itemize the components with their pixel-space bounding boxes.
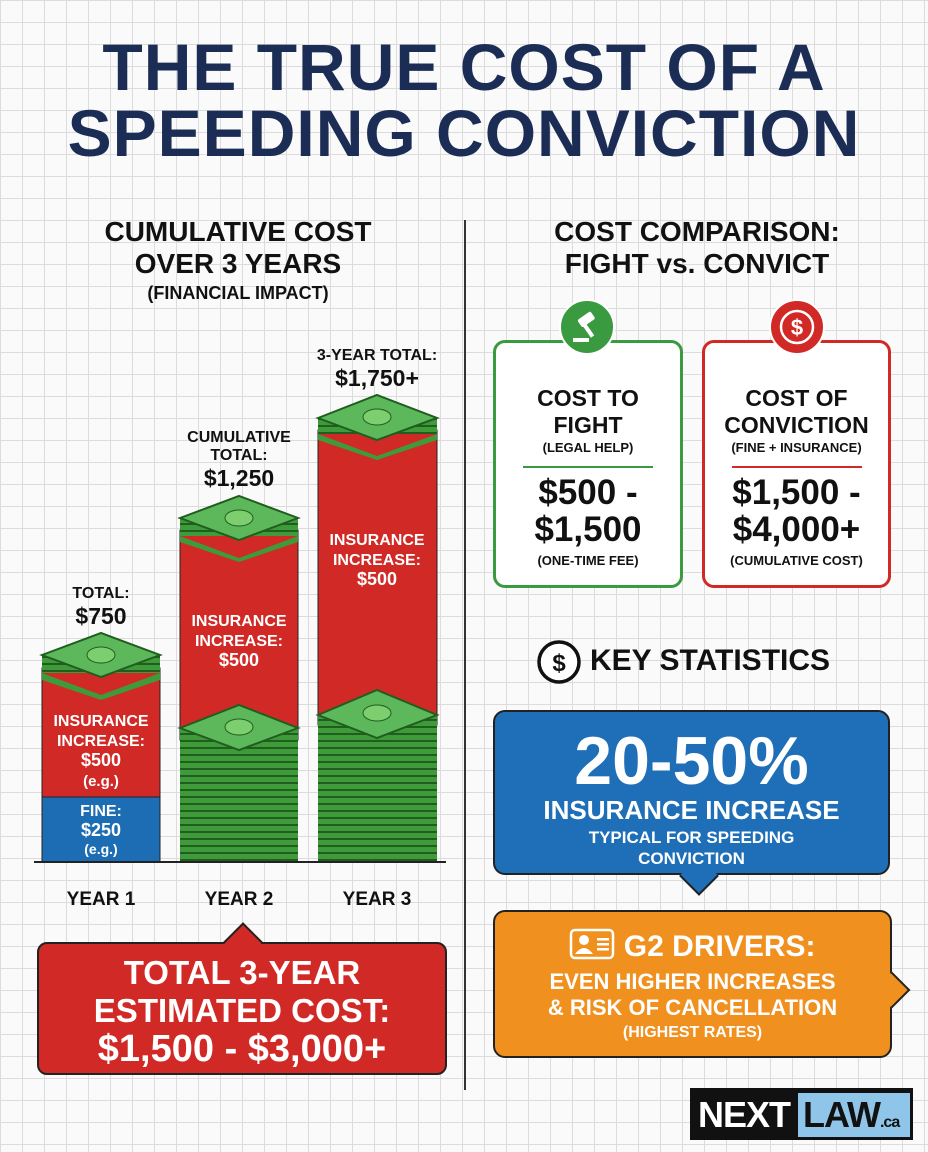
bar: year 2: INSURANCE xyxy=(191,613,287,630)
callout: total 3-year cost: TOTAL 3-YEAR xyxy=(124,954,360,991)
title: THE TRUE COST OF A xyxy=(102,30,826,104)
panel: cost to fight: FIGHT xyxy=(554,412,622,438)
divider xyxy=(464,220,466,1090)
callout: total 3-year cost: ESTIMATED COST: xyxy=(94,992,390,1029)
callout: total 3-year cost: $1,500 - $3,000+ xyxy=(98,1028,386,1070)
heading: cumulative cost: OVER 3 YEARS xyxy=(135,248,341,279)
bar: year 3: INCREASE: xyxy=(333,552,421,569)
bar: year 1: $500 xyxy=(81,750,121,770)
panel: cost of conviction: (FINE + INSURANCE) xyxy=(731,440,862,455)
icon: dollar circle: $ xyxy=(552,650,566,677)
callout: 20-50% xyxy=(493,710,890,875)
bar: year 1: $250 xyxy=(81,820,121,840)
panel: cost of conviction: CONVICTION xyxy=(724,412,869,438)
callout: 20-50%: CONVICTION xyxy=(638,849,745,868)
panel: cost to fight: $500 - xyxy=(538,473,638,512)
icon: dollar circle xyxy=(537,640,581,684)
bar: year 1: INCREASE: xyxy=(57,733,145,750)
totals labels: TOTAL: xyxy=(210,447,268,464)
icon: id card xyxy=(570,928,614,960)
logo: nextlaw: LAW.ca xyxy=(803,1094,899,1135)
panel: cost of conviction: $4,000+ xyxy=(733,510,860,549)
bar: year 3: $500 xyxy=(357,569,397,589)
bar: year 1: FINE: xyxy=(80,803,122,820)
callout: total 3-year cost xyxy=(37,942,447,1075)
panel: cost of conviction: $1,500 - xyxy=(732,473,861,512)
logo: nextlaw: NEXT xyxy=(698,1094,790,1135)
heading: cumulative cost: CUMULATIVE COST xyxy=(104,216,372,247)
bar: year 3 xyxy=(318,395,437,862)
totals labels: CUMULATIVE xyxy=(187,429,291,446)
callout: G2 drivers: EVEN HIGHER INCREASES xyxy=(549,969,836,994)
icon: gavel xyxy=(559,300,615,353)
heading: cost comparison xyxy=(554,216,840,279)
callout: 20-50%: INSURANCE INCREASE xyxy=(543,795,840,825)
callout: G2 drivers xyxy=(493,910,892,1058)
totals labels: 3-YEAR TOTAL: xyxy=(317,347,437,364)
bar chart xyxy=(34,347,446,910)
panel: cost to fight: (ONE-TIME FEE) xyxy=(537,553,639,568)
panel: cost of conviction: COST OF xyxy=(745,385,848,411)
heading: cost comparison: FIGHT vs. CONVICT xyxy=(565,248,829,279)
title xyxy=(68,30,860,170)
callout: G2 drivers: & RISK OF CANCELLATION xyxy=(548,995,837,1020)
callout: G2 drivers: G2 DRIVERS: xyxy=(624,930,816,963)
bar: year 1 xyxy=(42,633,160,862)
bar: year 1: INSURANCE xyxy=(53,713,149,730)
panel: cost to fight xyxy=(493,340,683,588)
icon: dollar: $ xyxy=(791,315,803,340)
bar: year 2: INCREASE: xyxy=(195,633,283,650)
callout: 20-50%: TYPICAL FOR SPEEDING xyxy=(589,828,794,847)
bar: year 3: INSURANCE xyxy=(329,532,425,549)
year labels: YEAR 2 xyxy=(205,889,273,910)
totals labels: $750 xyxy=(75,603,127,629)
bar: year 1: (e.g.) xyxy=(84,841,118,857)
panel: cost of conviction xyxy=(702,340,891,588)
year labels xyxy=(67,889,411,910)
panel: cost to fight: $1,500 xyxy=(534,510,642,549)
title: SPEEDING CONVICTION xyxy=(68,96,860,170)
callout: G2 drivers: (HIGHEST RATES) xyxy=(623,1024,762,1041)
panel: cost to fight: (LEGAL HELP) xyxy=(543,440,633,455)
icon: dollar xyxy=(769,299,825,353)
panel: cost to fight: COST TO xyxy=(537,385,639,411)
bar: year 2 xyxy=(180,496,298,862)
heading: cost comparison: COST COMPARISON: xyxy=(554,216,840,247)
year labels: YEAR 1 xyxy=(67,889,136,910)
bar: year 2: $500 xyxy=(219,650,259,670)
logo: nextlaw xyxy=(690,1088,913,1140)
heading: cumulative cost: (FINANCIAL IMPACT) xyxy=(147,283,329,303)
heading: key statistics xyxy=(537,640,830,684)
callout: 20-50%: 20-50% xyxy=(574,723,809,799)
totals labels xyxy=(72,347,437,629)
totals labels: $1,750+ xyxy=(335,365,419,391)
heading: cumulative cost xyxy=(104,216,372,303)
year labels: YEAR 3 xyxy=(343,889,411,910)
totals labels: $1,250 xyxy=(204,465,274,491)
heading: key statistics: KEY STATISTICS xyxy=(590,644,830,677)
totals labels: TOTAL: xyxy=(72,585,130,602)
panel: cost of conviction: (CUMULATIVE COST) xyxy=(730,553,863,568)
bar: year 1: (e.g.) xyxy=(83,773,119,790)
